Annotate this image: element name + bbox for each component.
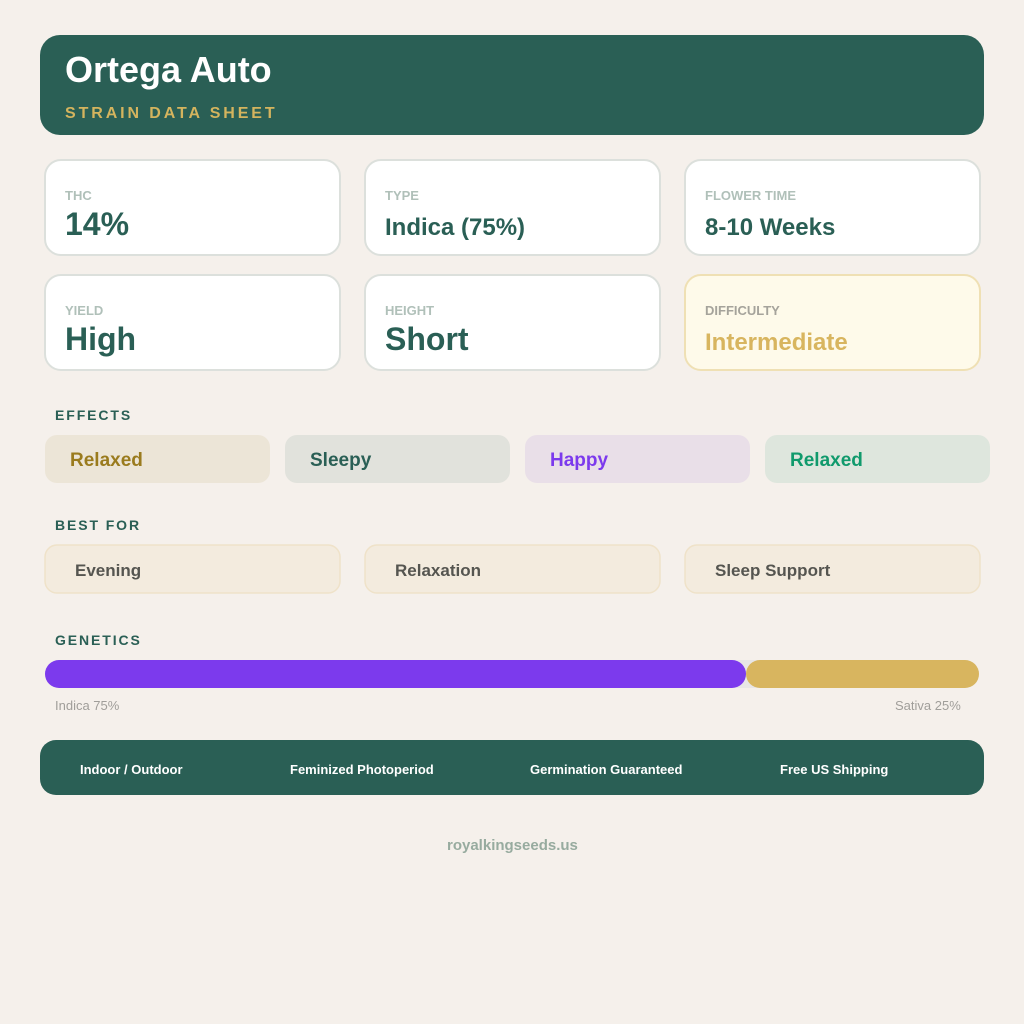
- footer banner: Indoor / Outdoor: [80, 762, 183, 777]
- footer banner: Free US Shipping: [780, 762, 888, 777]
- title: Ortega Auto: [65, 49, 272, 90]
- effect pill: happy: Happy: [550, 450, 608, 471]
- card: type: TYPE: [385, 188, 419, 203]
- card: flower time: [685, 160, 980, 255]
- heading: best for: BEST FOR: [55, 517, 141, 533]
- effect pill: happy: [525, 435, 750, 483]
- footer banner: Germination Guaranteed: [530, 762, 682, 777]
- card: type: [365, 160, 660, 255]
- best for: evening: Evening: [75, 561, 141, 580]
- card: height: HEIGHT: [385, 303, 434, 318]
- best for: sleep support: [685, 545, 980, 593]
- label: sativa: Sativa 25%: [895, 698, 961, 713]
- label: indica: Indica 75%: [55, 698, 120, 713]
- best for: relaxation: Relaxation: [395, 561, 481, 580]
- best for: relaxation: [365, 545, 660, 593]
- indica segment: [45, 660, 746, 688]
- card: height: Short: [385, 321, 469, 357]
- card: yield: [45, 275, 340, 370]
- sativa segment: [746, 660, 979, 688]
- effect pill: sleepy: [285, 435, 510, 483]
- effect pill: sleepy: Sleepy: [310, 450, 372, 471]
- card: flower time: 8-10 Weeks: [705, 214, 835, 241]
- card: yield: YIELD: [65, 303, 103, 318]
- website: royalkingseeds.us: [447, 837, 578, 854]
- heading: effects: EFFECTS: [55, 407, 132, 423]
- genetics bar: [45, 660, 979, 688]
- header banner: [40, 35, 984, 135]
- card: difficulty: DIFFICULTY: [705, 303, 780, 318]
- footer banner: Feminized Photoperiod: [290, 762, 434, 777]
- card: THC: 14%: [65, 206, 129, 242]
- subtitle: STRAIN DATA SHEET: [65, 105, 278, 122]
- card: flower time: FLOWER TIME: [705, 188, 796, 203]
- card: difficulty: Intermediate: [705, 329, 848, 356]
- effect pill: relaxed green: [765, 435, 990, 483]
- card: difficulty: [685, 275, 980, 370]
- footer banner: [40, 740, 984, 795]
- best for: evening: [45, 545, 340, 593]
- best for: sleep support: Sleep Support: [715, 561, 831, 580]
- card: type: Indica (75%): [385, 214, 525, 241]
- card: THC: [45, 160, 340, 255]
- heading: genetics: GENETICS: [55, 632, 142, 648]
- effect pill: relaxed: [45, 435, 270, 483]
- effect pill: relaxed green: Relaxed: [790, 450, 863, 471]
- card: yield: High: [65, 321, 136, 357]
- card: height: [365, 275, 660, 370]
- card: THC: THC: [65, 188, 92, 203]
- effect pill: relaxed: Relaxed: [70, 450, 143, 471]
